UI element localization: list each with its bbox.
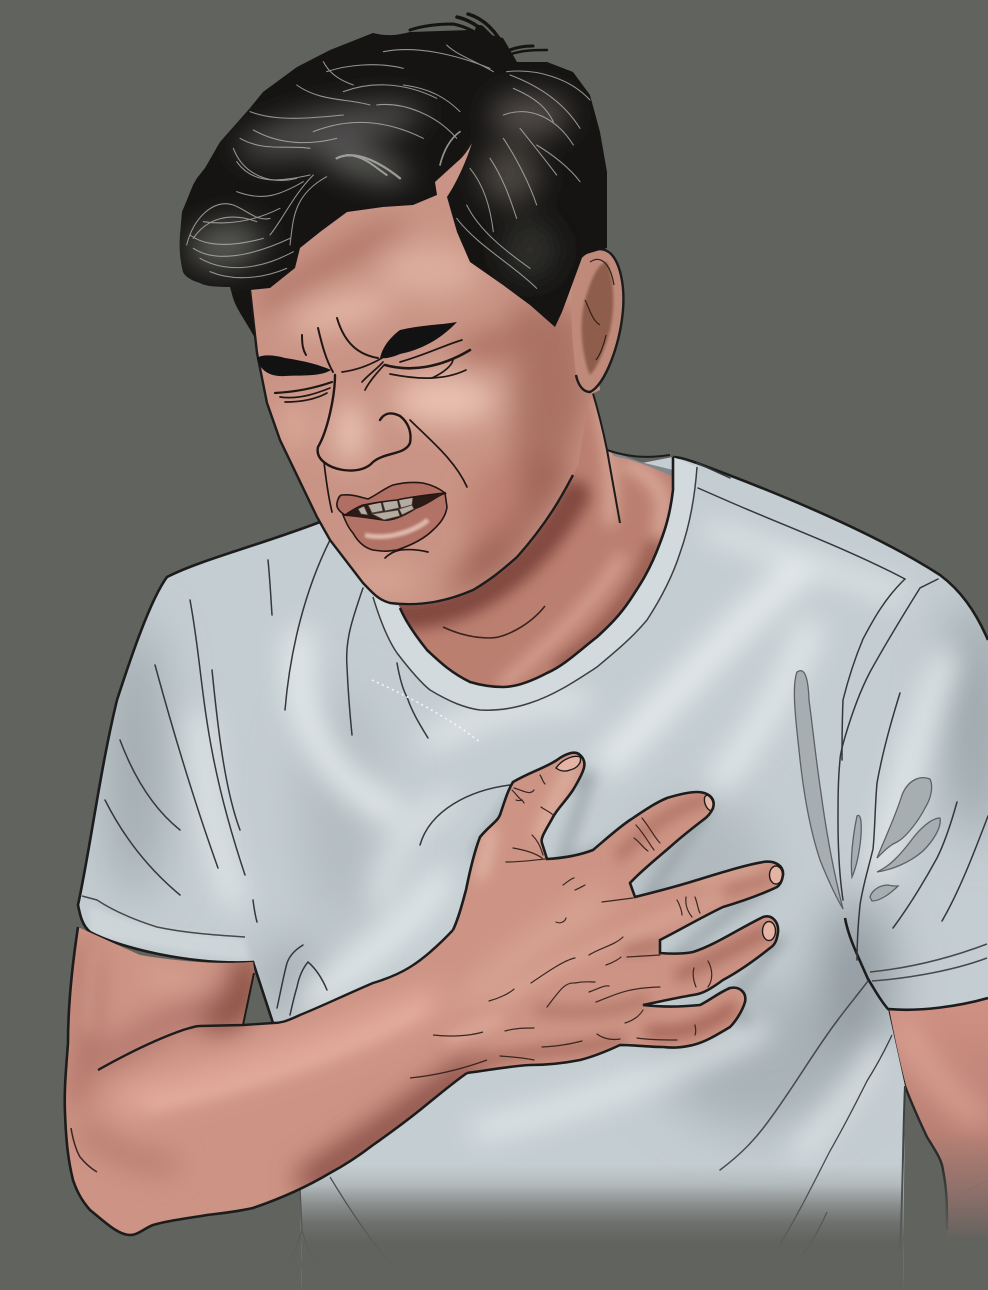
upper arm back edge [243, 973, 254, 1025]
neck right outline [592, 390, 670, 523]
stitched dotted line [372, 680, 480, 742]
hand [453, 753, 783, 1073]
lower lip [343, 493, 447, 551]
shirt outline armpit and hem [845, 918, 988, 1010]
elbow crease [71, 1128, 97, 1172]
shirt fade at bottom [300, 1173, 904, 1243]
left arm and hand skin [50, 740, 800, 1250]
nails [556, 756, 782, 940]
shirt outline shoulder [673, 457, 988, 640]
t-shirt [60, 450, 988, 1290]
sleeve hem left [92, 910, 248, 960]
face outline [250, 290, 573, 604]
face shading [255, 225, 590, 600]
hand outline [453, 753, 783, 1073]
shirt right edge [900, 1086, 905, 1250]
limb shading [75, 900, 600, 1180]
shirt folds [105, 463, 988, 1170]
hand drop shadow [475, 776, 780, 1021]
face [250, 144, 600, 606]
mouth opening [345, 494, 443, 520]
shirt shading [107, 600, 988, 1130]
inner elbow and forearm top outline [98, 930, 453, 1070]
hair tuft [410, 14, 547, 60]
lower shirt folds fading out [288, 1035, 892, 1265]
eyes and wrinkles [275, 318, 470, 558]
neck crease [443, 606, 545, 638]
hair strands [187, 45, 590, 288]
inside of shirt back collar [611, 452, 672, 476]
eyebrows [257, 322, 457, 376]
mouth [337, 482, 447, 551]
sleeve hem right [870, 944, 987, 972]
arm outline [65, 927, 467, 1235]
t-shirt collar [373, 457, 697, 710]
teeth [358, 497, 414, 520]
shirt outline left [78, 522, 320, 1023]
ear [571, 249, 623, 392]
upper lip [337, 482, 445, 515]
nose [318, 375, 411, 471]
hair mass [180, 30, 607, 338]
lip highlight [365, 520, 428, 537]
neck [398, 393, 672, 686]
hair [180, 14, 607, 338]
right forearm [888, 998, 988, 1240]
hair sheen [183, 89, 570, 280]
knuckle and tendon lines [489, 775, 712, 1060]
wrist lines [410, 1032, 487, 1078]
armpit fold shapes [794, 671, 940, 909]
